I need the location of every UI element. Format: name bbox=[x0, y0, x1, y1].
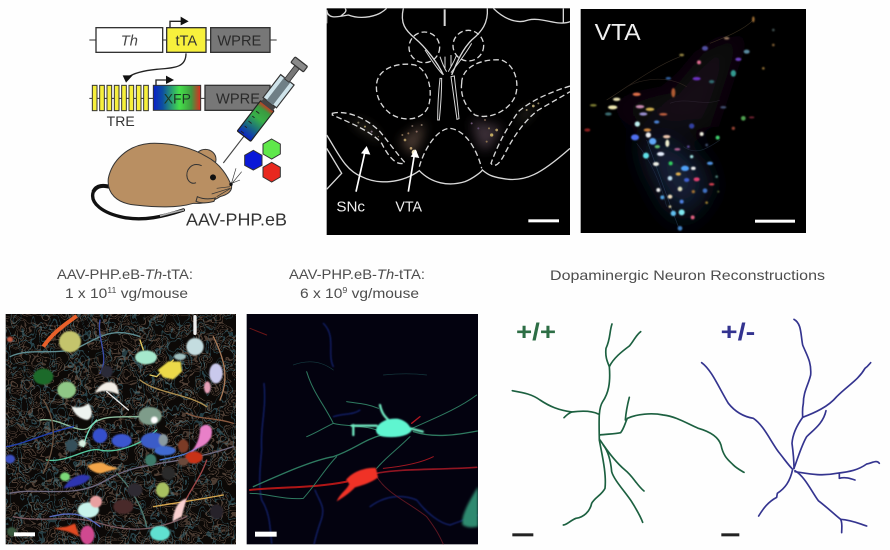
panel: dense labelling micrograph bbox=[5, 314, 236, 544]
faint fibres bbox=[607, 20, 753, 227]
construct 2: TRE-XFP-WPRE: WPRE bbox=[216, 91, 260, 107]
heading: low dose: AAV-PHP.eB- Th-tTA: bbox=[289, 266, 425, 282]
reconstruction: heterozygous neuron bbox=[702, 319, 879, 533]
heading: high dose: vg/mouse bbox=[116, 285, 188, 301]
construct 1: Th-tTA-WPRE: Th bbox=[121, 34, 138, 50]
reconstruction: wild type neuron bbox=[512, 324, 744, 525]
heading: high dose: 1 x 10 bbox=[65, 285, 103, 301]
atlas outlines bbox=[327, 8, 570, 189]
scale bar bbox=[528, 219, 559, 222]
scale bar: wild type bbox=[512, 533, 533, 536]
scale bar bbox=[14, 532, 35, 536]
panel: midbrain section overview bbox=[327, 8, 570, 235]
heading: high dose: AAV-PHP.eB- Th-tTA: bbox=[57, 266, 193, 282]
blue neurites bbox=[260, 323, 478, 544]
arrow: SNc bbox=[356, 146, 370, 192]
arrow: tTA acts on TRE bbox=[123, 53, 186, 83]
heading: low dose bbox=[289, 266, 425, 301]
construct 1: Th-tTA-WPRE: tTA bbox=[175, 34, 197, 50]
heading: high dose bbox=[57, 266, 193, 301]
labelled cell bodies bbox=[584, 16, 775, 231]
icon: coloured capsids bbox=[245, 139, 280, 182]
construct 1: Th-tTA-WPRE: WPRE bbox=[217, 34, 262, 50]
label: +/+: +/+ bbox=[516, 319, 556, 346]
construct 2: TRE-XFP-WPRE: TRE bbox=[107, 113, 135, 129]
labelled cell signal bbox=[348, 102, 539, 155]
green neuron bbox=[352, 405, 423, 437]
label: SNc: SNc bbox=[336, 199, 365, 215]
heading: low dose: 6 x 10 bbox=[300, 285, 338, 301]
label: +/-: +/- bbox=[721, 319, 755, 346]
icon: syringe bbox=[217, 57, 308, 168]
green neurites bbox=[250, 362, 477, 499]
scale bar bbox=[255, 532, 277, 537]
panel: neuron reconstructions bbox=[512, 319, 879, 536]
construct 2: TRE-XFP-WPRE: XFP bbox=[164, 90, 191, 106]
scale bar: heterozygous bbox=[721, 533, 739, 536]
panel: sparse labelling micrograph bbox=[247, 314, 478, 544]
haze of labelled neurites bbox=[617, 36, 743, 225]
construct 2: TRE-XFP-WPRE bbox=[89, 76, 273, 129]
partial green cell bbox=[462, 487, 478, 527]
label: VTA: VTA bbox=[395, 199, 422, 215]
label: AAV-PHP.eB: AAV-PHP.eB bbox=[186, 209, 287, 229]
neurites bbox=[7, 317, 233, 529]
dense fibre texture bbox=[6, 314, 236, 544]
heading: reconstructions: Dopaminergic Neuron Reconstructions bbox=[550, 267, 825, 283]
icon: mouse bbox=[93, 143, 242, 219]
panel: VTA close-up bbox=[581, 9, 806, 233]
panel: viral construct schematic bbox=[89, 17, 308, 229]
red neuron bbox=[337, 468, 378, 501]
red neurites bbox=[250, 328, 477, 544]
heading: low dose: vg/mouse bbox=[347, 285, 419, 301]
construct 1: Th-tTA-WPRE bbox=[89, 17, 277, 52]
label: VTA: VTA bbox=[595, 19, 641, 45]
heading: high dose: 11 bbox=[107, 286, 117, 295]
scale bar bbox=[755, 220, 795, 223]
heading: low dose: 9 bbox=[342, 286, 348, 295]
labelled somata bbox=[5, 316, 223, 544]
arrow: VTA bbox=[408, 149, 419, 192]
